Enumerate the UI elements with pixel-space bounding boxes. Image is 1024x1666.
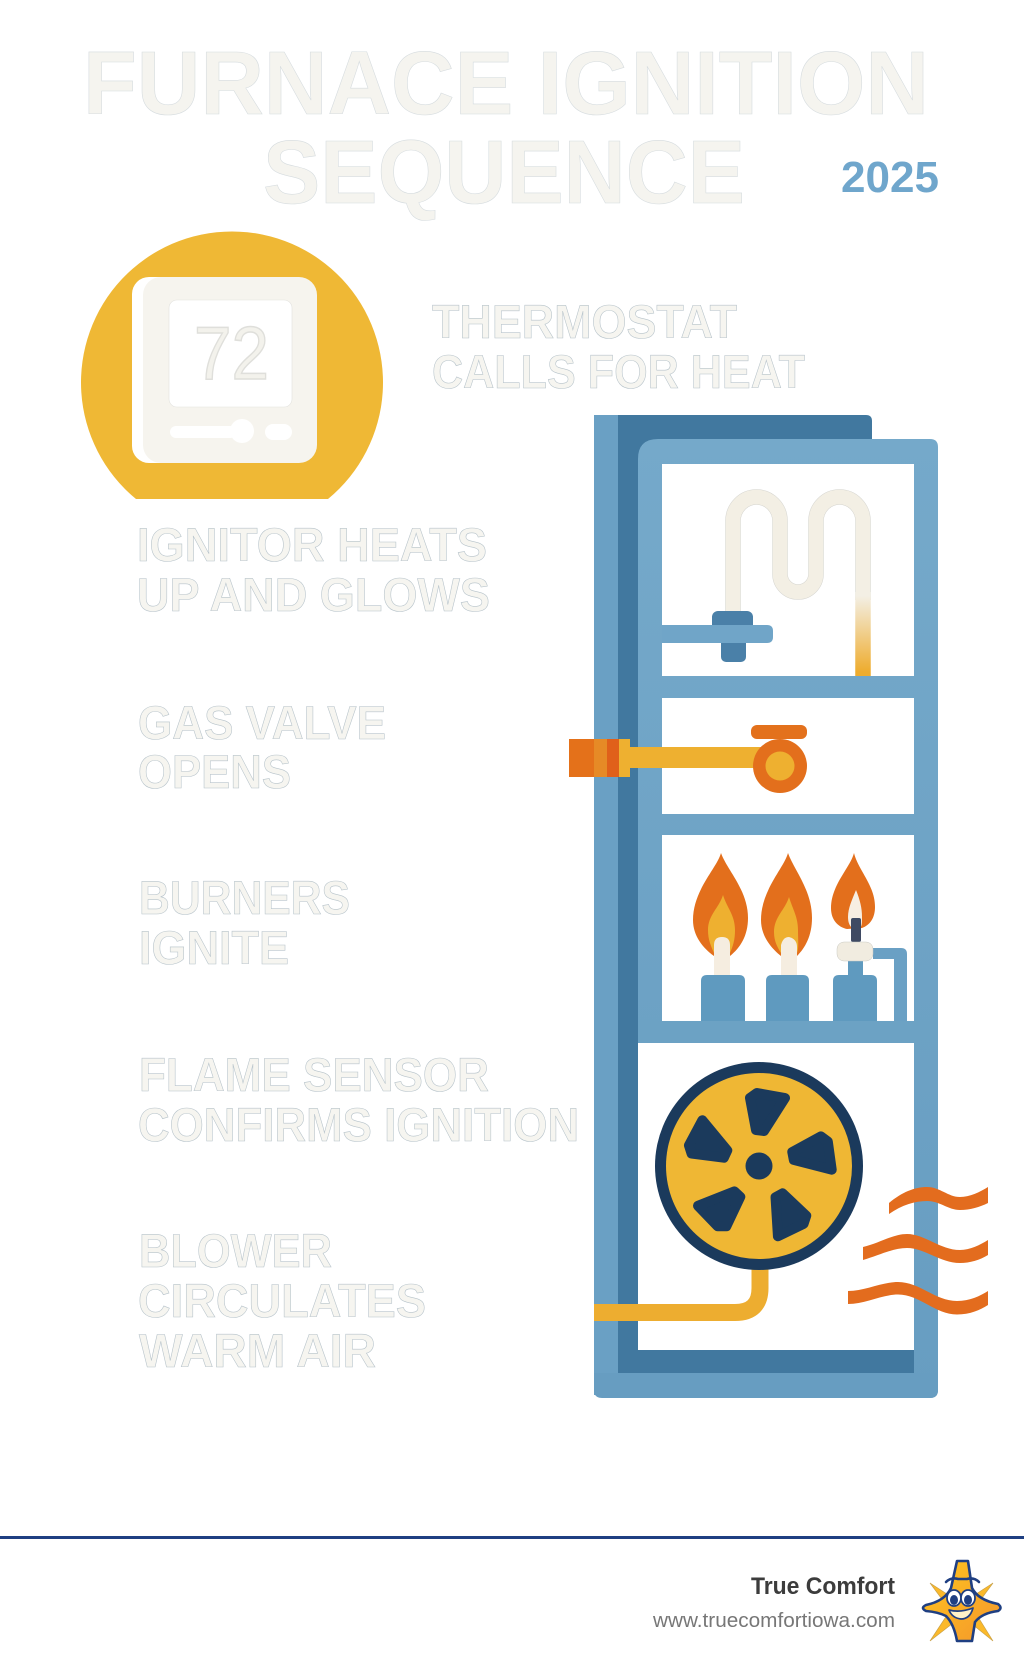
footer website: www.truecomfortiowa.com bbox=[652, 1610, 895, 1632]
burner 1 with flame bbox=[693, 853, 748, 1021]
icon: thermostat on yellow circle bbox=[81, 231, 383, 499]
step label: burners ignite: BURNERS bbox=[139, 871, 350, 924]
step label: thermostat calls for heat bbox=[432, 295, 805, 398]
step label: blower circulates warm air bbox=[138, 1224, 426, 1377]
gas line to blower bbox=[594, 1268, 760, 1312]
step label: ignitor heats up and glows bbox=[137, 518, 490, 621]
step label: burners ignite: IGNITE bbox=[139, 921, 289, 974]
step label: blower circulates warm air: WARM AIR bbox=[139, 1324, 376, 1377]
year label: 2025 bbox=[841, 153, 939, 202]
title: FURNACE IGNITION bbox=[83, 34, 929, 134]
step label: flame sensor confirms ignition bbox=[138, 1048, 579, 1151]
title bbox=[83, 34, 929, 223]
furnace cabinet bbox=[594, 415, 938, 1398]
icon: thermostat on yellow circle: 72 bbox=[194, 311, 269, 395]
gas valve bbox=[569, 725, 807, 793]
step label: ignitor heats up and glows: IGNITOR HEATS bbox=[137, 518, 487, 571]
step label: thermostat calls for heat: CALLS FOR HEAT bbox=[432, 345, 805, 398]
step label: thermostat calls for heat: THERMOSTAT bbox=[432, 295, 737, 348]
step label: burners ignite bbox=[139, 871, 350, 974]
title: SEQUENCE bbox=[263, 123, 745, 223]
step label: gas valve opens bbox=[138, 696, 386, 798]
icon: star mascot logo bbox=[923, 1561, 1000, 1641]
step label: blower circulates warm air: CIRCULATES bbox=[138, 1274, 426, 1327]
step label: flame sensor confirms ignition: FLAME SENSOR bbox=[139, 1048, 489, 1101]
step label: gas valve opens: OPENS bbox=[138, 745, 291, 798]
burner 3 with flame sensor bbox=[831, 853, 907, 1021]
step label: ignitor heats up and glows: UP AND GLOWS bbox=[137, 568, 490, 621]
footer rule bbox=[0, 1536, 1024, 1539]
burner 2 with flame bbox=[761, 853, 812, 1021]
footer brand name: True Comfort bbox=[751, 1573, 895, 1600]
step label: gas valve opens: GAS VALVE bbox=[138, 696, 386, 749]
blower fan bbox=[655, 1062, 863, 1270]
step label: flame sensor confirms ignition: CONFIRMS IGNITION bbox=[138, 1098, 579, 1151]
ignitor element bbox=[662, 497, 863, 676]
warm air waves bbox=[848, 1187, 988, 1314]
step label: blower circulates warm air: BLOWER bbox=[139, 1224, 332, 1277]
